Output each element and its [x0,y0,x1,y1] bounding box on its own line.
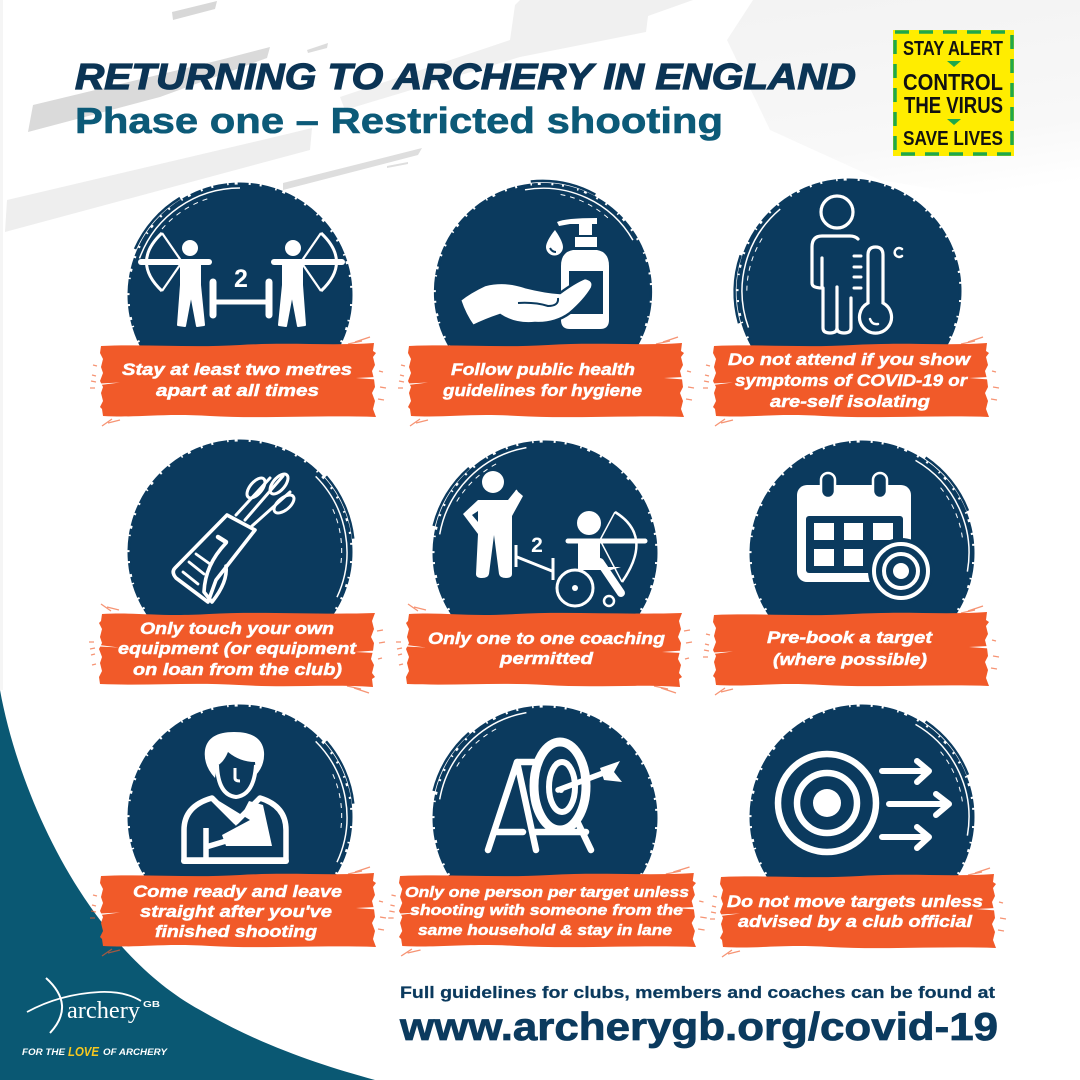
caption [118,619,358,679]
caption: same household & stay in lane [418,922,672,939]
badge circle [423,442,656,664]
badge circle [700,180,960,402]
caption [133,882,342,941]
panel: two metres [90,184,386,426]
banner [703,337,999,426]
caption: guidelines for hygiene [442,381,642,400]
caption [428,629,666,668]
caption: (where possible) [773,650,927,669]
banner [90,337,386,426]
caption: Do not attend if you show [728,350,972,369]
icon: person with arm sling [184,732,286,861]
footer url: www.archerygb.org/covid-19 [399,1006,998,1049]
badge circle [423,707,656,929]
caption: permitted [499,649,594,668]
banner [396,604,692,693]
caption: advised by a club official [738,912,973,931]
caption: Follow public health [451,360,635,379]
icon: two archers two metres apart [141,233,342,326]
panel: one to one coaching [396,442,692,693]
logo: archery GB: FOR THE [22,1047,66,1057]
caption [442,360,642,400]
badge: stay alert: SAVE LIVES [903,128,1003,150]
badge: stay alert: STAY ALERT [903,38,1003,60]
logo: archery GB: LOVE [68,1044,99,1059]
caption: on loan from the club) [133,660,342,679]
badge circle [129,706,381,928]
icon: coach and wheelchair archer: 2 [531,534,543,557]
caption [122,360,352,400]
icon: coach and wheelchair archer [463,471,645,606]
badge circle [129,184,351,406]
caption [728,350,972,411]
badge: stay alert [893,30,1014,156]
logo: archery GB: GB [143,999,160,1009]
footer note: Full guidelines for clubs, members and coaches can be found at [400,983,995,1002]
badge circle [751,442,986,664]
caption: equipment (or equipment [118,639,358,658]
icon: person with thermometer [812,196,902,333]
panel: pre-book [703,442,999,695]
caption [727,892,983,931]
banner [388,867,707,956]
caption: Come ready and leave [133,882,342,901]
banner [710,868,1006,957]
caption [767,628,934,669]
badge: stay alert: THE VIRUS [904,92,1003,118]
icon: two archers two metres apart: 2 [234,265,248,293]
caption: Stay at least two metres [122,360,352,379]
badge circle [435,152,651,400]
title: RETURNING TO ARCHERY IN ENGLAND [75,56,856,97]
badge circle [751,706,986,928]
logo: archery GB: OF ARCHERY [103,1047,168,1057]
caption: finished shooting [155,922,318,941]
caption: Only one to one coaching [428,629,666,648]
caption: Only one person per target unless [405,884,689,901]
logo: archery GB [22,978,168,1059]
background: grey brush stripes [0,0,1080,690]
caption: are-self isolating [770,392,931,411]
panel: do not move targets [710,706,1006,957]
caption: Only touch your own [140,619,334,638]
icon: calendar with target [797,473,934,604]
caption: Do not move targets unless [727,892,983,911]
banner [90,867,386,956]
caption: apart at all times [156,381,319,400]
banner [703,606,999,695]
icon: hand under pump bottle [460,218,609,329]
badge: stay alert: CONTROL [903,69,1003,95]
logo: archery GB: archery [67,998,140,1024]
icon: target with motion arrows [778,754,949,852]
teal corner swoosh [0,690,375,1080]
subtitle: Phase one – Restricted shooting [75,100,723,141]
badge circle [129,441,381,663]
caption: straight after you've [140,902,332,921]
caption: Pre-book a target [767,628,934,647]
icon: target on stand with arrow [488,742,622,850]
banner [398,337,694,426]
panel: hygiene [398,152,694,426]
panel: come ready [90,706,386,956]
banner [89,604,385,693]
panel: own equipment [89,441,385,693]
caption: symptoms of COVID-19 or [735,371,969,390]
icon: quiver with arrows [173,471,297,602]
caption: shooting with someone from the [410,902,683,919]
panel: one per target [388,707,707,956]
caption [405,884,689,939]
panel: symptoms [700,180,999,426]
